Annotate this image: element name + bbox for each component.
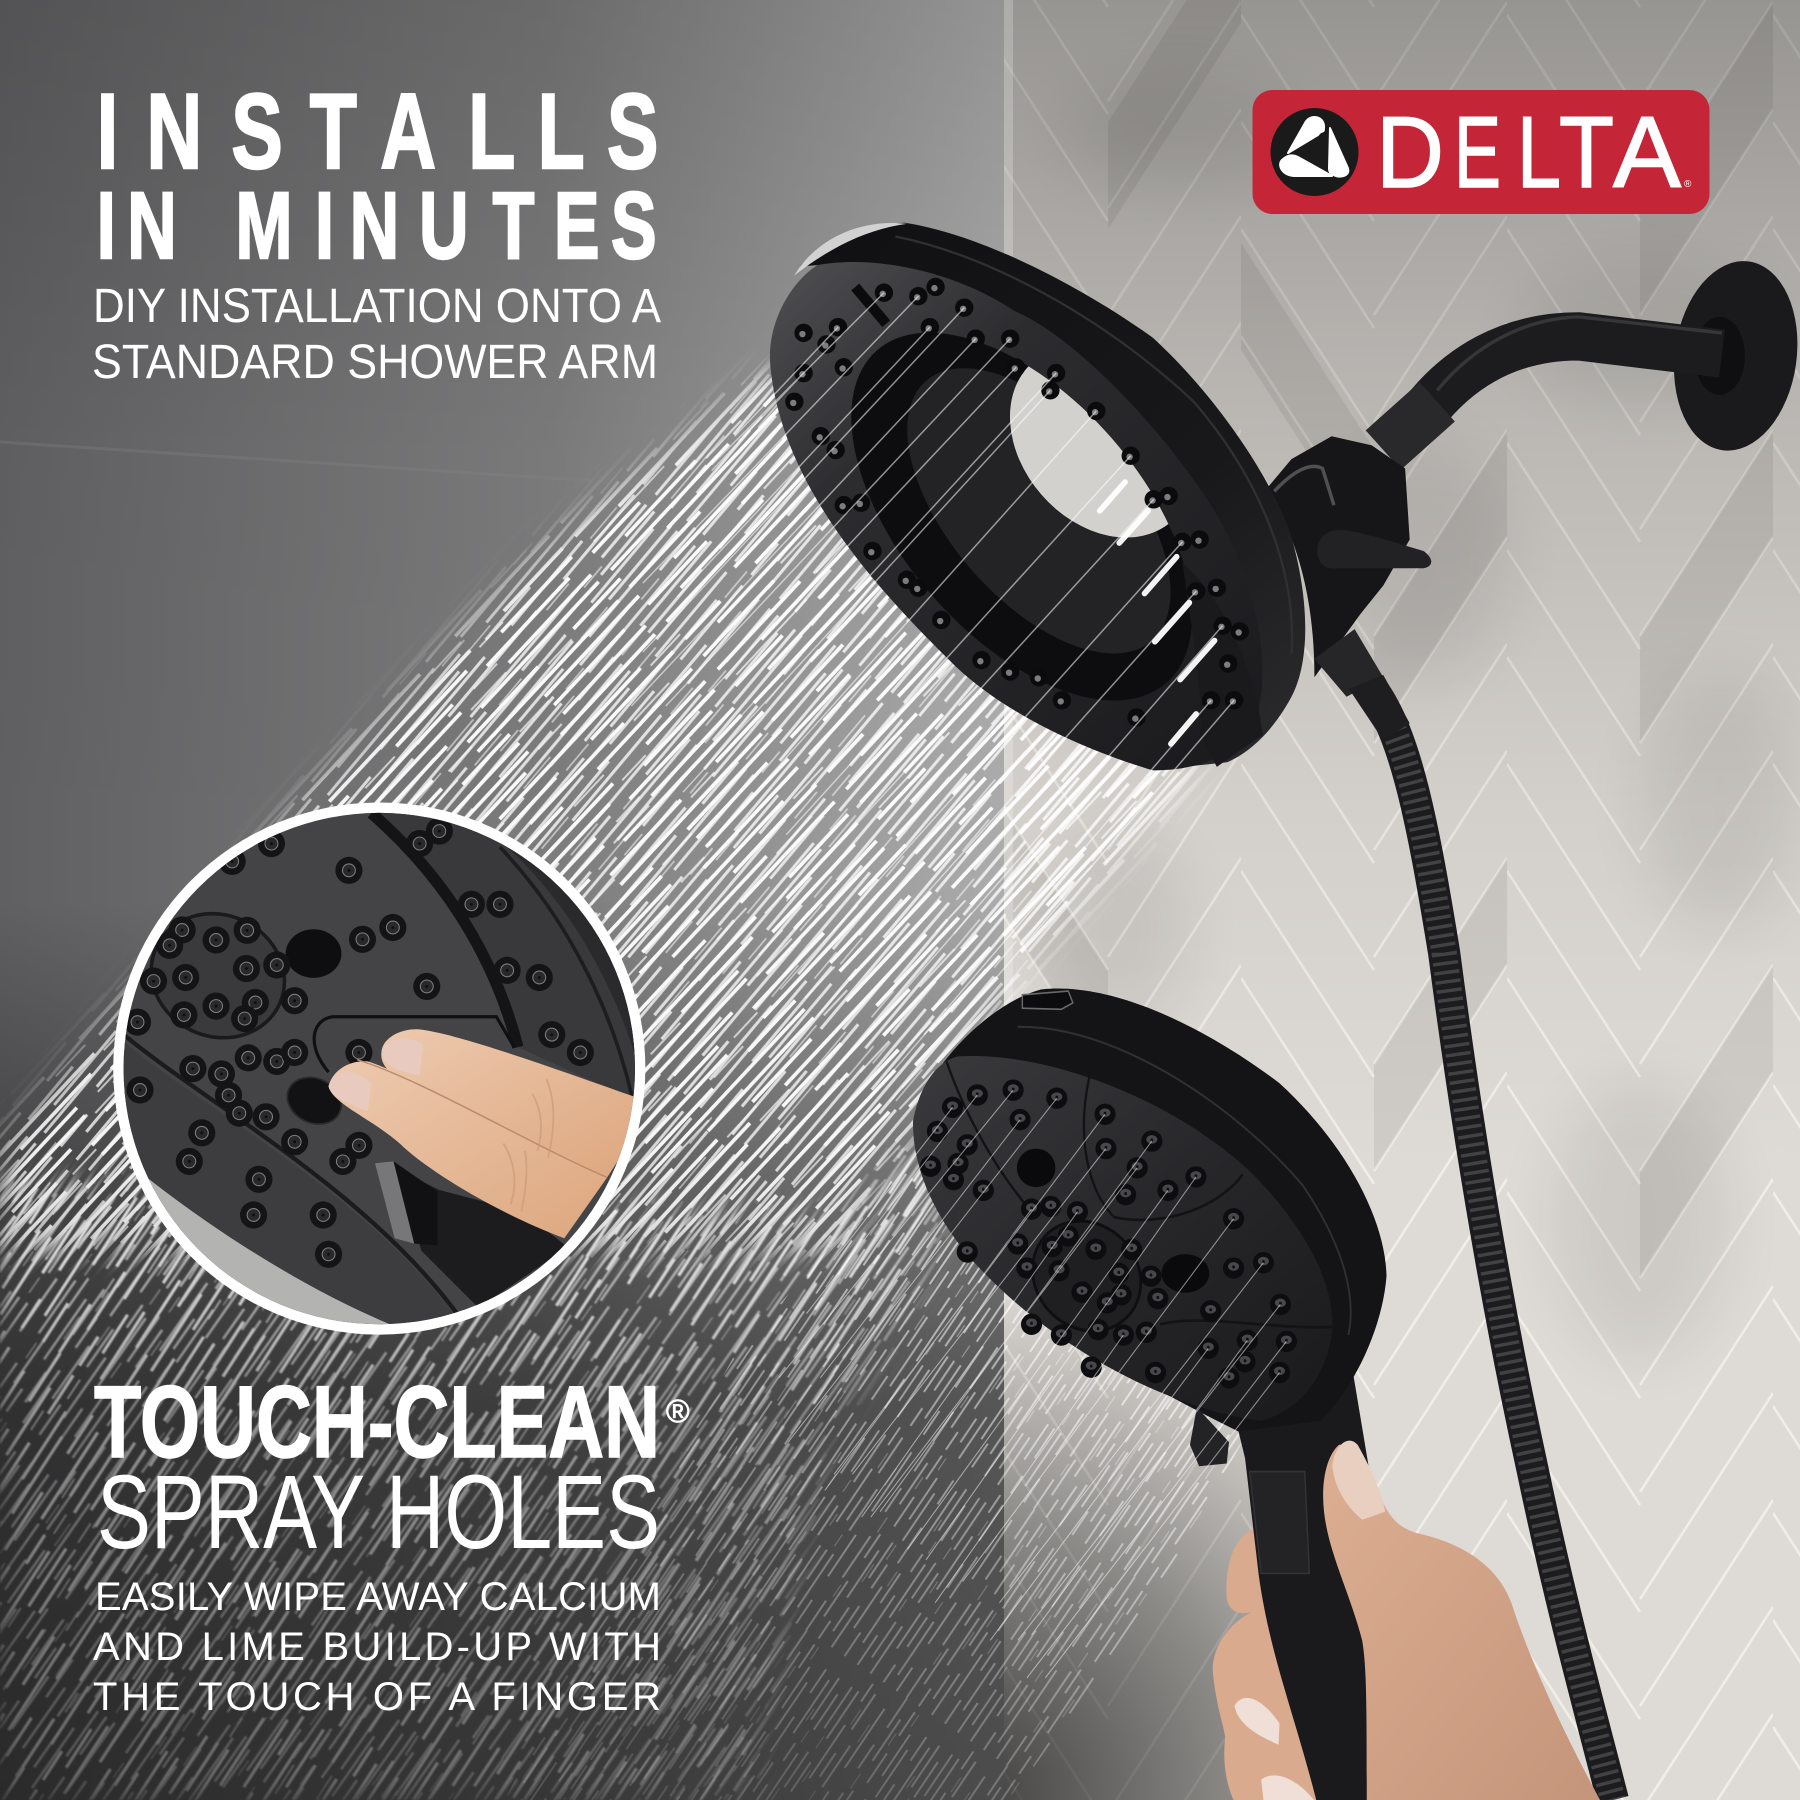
outer rim zone — [371, 801, 643, 1104]
recessed centre — [787, 272, 1256, 761]
connector and diverter lever — [1267, 436, 1431, 740]
handle shadow — [396, 1169, 568, 1308]
wordmark: T — [1559, 97, 1614, 209]
flap — [1182, 563, 1263, 767]
face curves — [947, 1062, 1332, 1327]
diverter tab — [1190, 1407, 1229, 1466]
icon: Delta triangle mark — [1270, 108, 1358, 196]
fingernails — [1235, 1698, 1314, 1800]
body text: Touch-Clean description: AND LIME BUILD-UP WITH — [93, 1625, 661, 1669]
wordmark: E — [1454, 97, 1501, 209]
wordmark: L — [1517, 97, 1561, 209]
nozzles — [920, 1079, 1297, 1389]
rim — [800, 223, 1305, 770]
upper finger — [381, 1029, 636, 1177]
heading: Installs in minutes: INSTALLS — [97, 72, 658, 191]
handle — [1236, 1372, 1374, 1800]
large holes — [286, 929, 341, 978]
body text: Touch-Clean description: THE TOUCH OF A FINGER — [93, 1675, 661, 1719]
thumb and hand — [1323, 1445, 1600, 1800]
subheading: DIY installation: DIY INSTALLATION ONTO A — [93, 280, 661, 333]
body rim — [914, 988, 1386, 1431]
handle panel — [1250, 1472, 1309, 1573]
centre oval — [150, 912, 286, 1040]
lower rim — [121, 1033, 461, 1319]
lever — [375, 1161, 414, 1244]
wordmark: A — [1613, 97, 1682, 209]
spray nozzles — [124, 817, 594, 1268]
wordmark — [1376, 97, 1692, 209]
heading: Touch-Clean spray holes: SPRAY HOLES — [97, 1454, 660, 1571]
heading: Touch-Clean spray holes — [94, 1365, 690, 1571]
knuckle creases — [504, 1079, 553, 1211]
plate recess — [314, 1017, 514, 1072]
heading: Touch-Clean spray holes: TOUCH-CLEAN — [94, 1365, 660, 1479]
thumbnail — [1332, 1441, 1385, 1520]
body text: Touch-Clean description: EASILY WIPE AWAY CALCIUM — [95, 1575, 661, 1619]
thin water jets over head — [631, 293, 1234, 1102]
centre oval — [1019, 1204, 1154, 1348]
body text: Touch-Clean description — [93, 1575, 661, 1719]
thin jets — [779, 1090, 1286, 1678]
central opening — [1010, 366, 1168, 538]
hand shower spray — [505, 1148, 1263, 1800]
heading: Installs in minutes: IN MINUTES — [97, 172, 657, 279]
top-left background — [114, 811, 271, 969]
heading: Installs in minutes — [97, 72, 658, 279]
hand shower — [779, 988, 1600, 1800]
background: grey left wall — [0, 0, 1006, 1800]
white ring — [113, 802, 645, 1335]
subheading: DIY installation: STANDARD SHOWER ARM — [92, 336, 658, 389]
top slot — [1022, 991, 1073, 1009]
Delta logo — [1252, 90, 1710, 214]
background: herringbone marble tile wall — [975, 0, 1800, 1800]
face plate — [913, 1056, 1332, 1421]
wordmark: ® — [1684, 179, 1692, 190]
bright jet highlights — [1100, 482, 1215, 744]
subheading: DIY installation — [92, 280, 661, 389]
gripping fingers — [1213, 1528, 1319, 1800]
nozzles — [785, 278, 1249, 727]
large holes — [1017, 1149, 1055, 1187]
wall glimpse — [149, 1179, 389, 1324]
face plate — [770, 262, 1262, 770]
lower finger — [329, 1061, 607, 1238]
shower arm and wall flange — [1383, 253, 1800, 459]
rain shower head — [631, 223, 1305, 1102]
inset circle: finger wiping spray holes — [100, 790, 660, 1350]
water spray from rain shower head — [0, 321, 1263, 1800]
rim highlight — [794, 223, 907, 276]
heading: Touch-Clean spray holes: ® — [666, 1393, 690, 1429]
fingernails — [381, 1039, 423, 1076]
hose — [1372, 689, 1613, 1800]
wordmark: D — [1376, 97, 1444, 209]
